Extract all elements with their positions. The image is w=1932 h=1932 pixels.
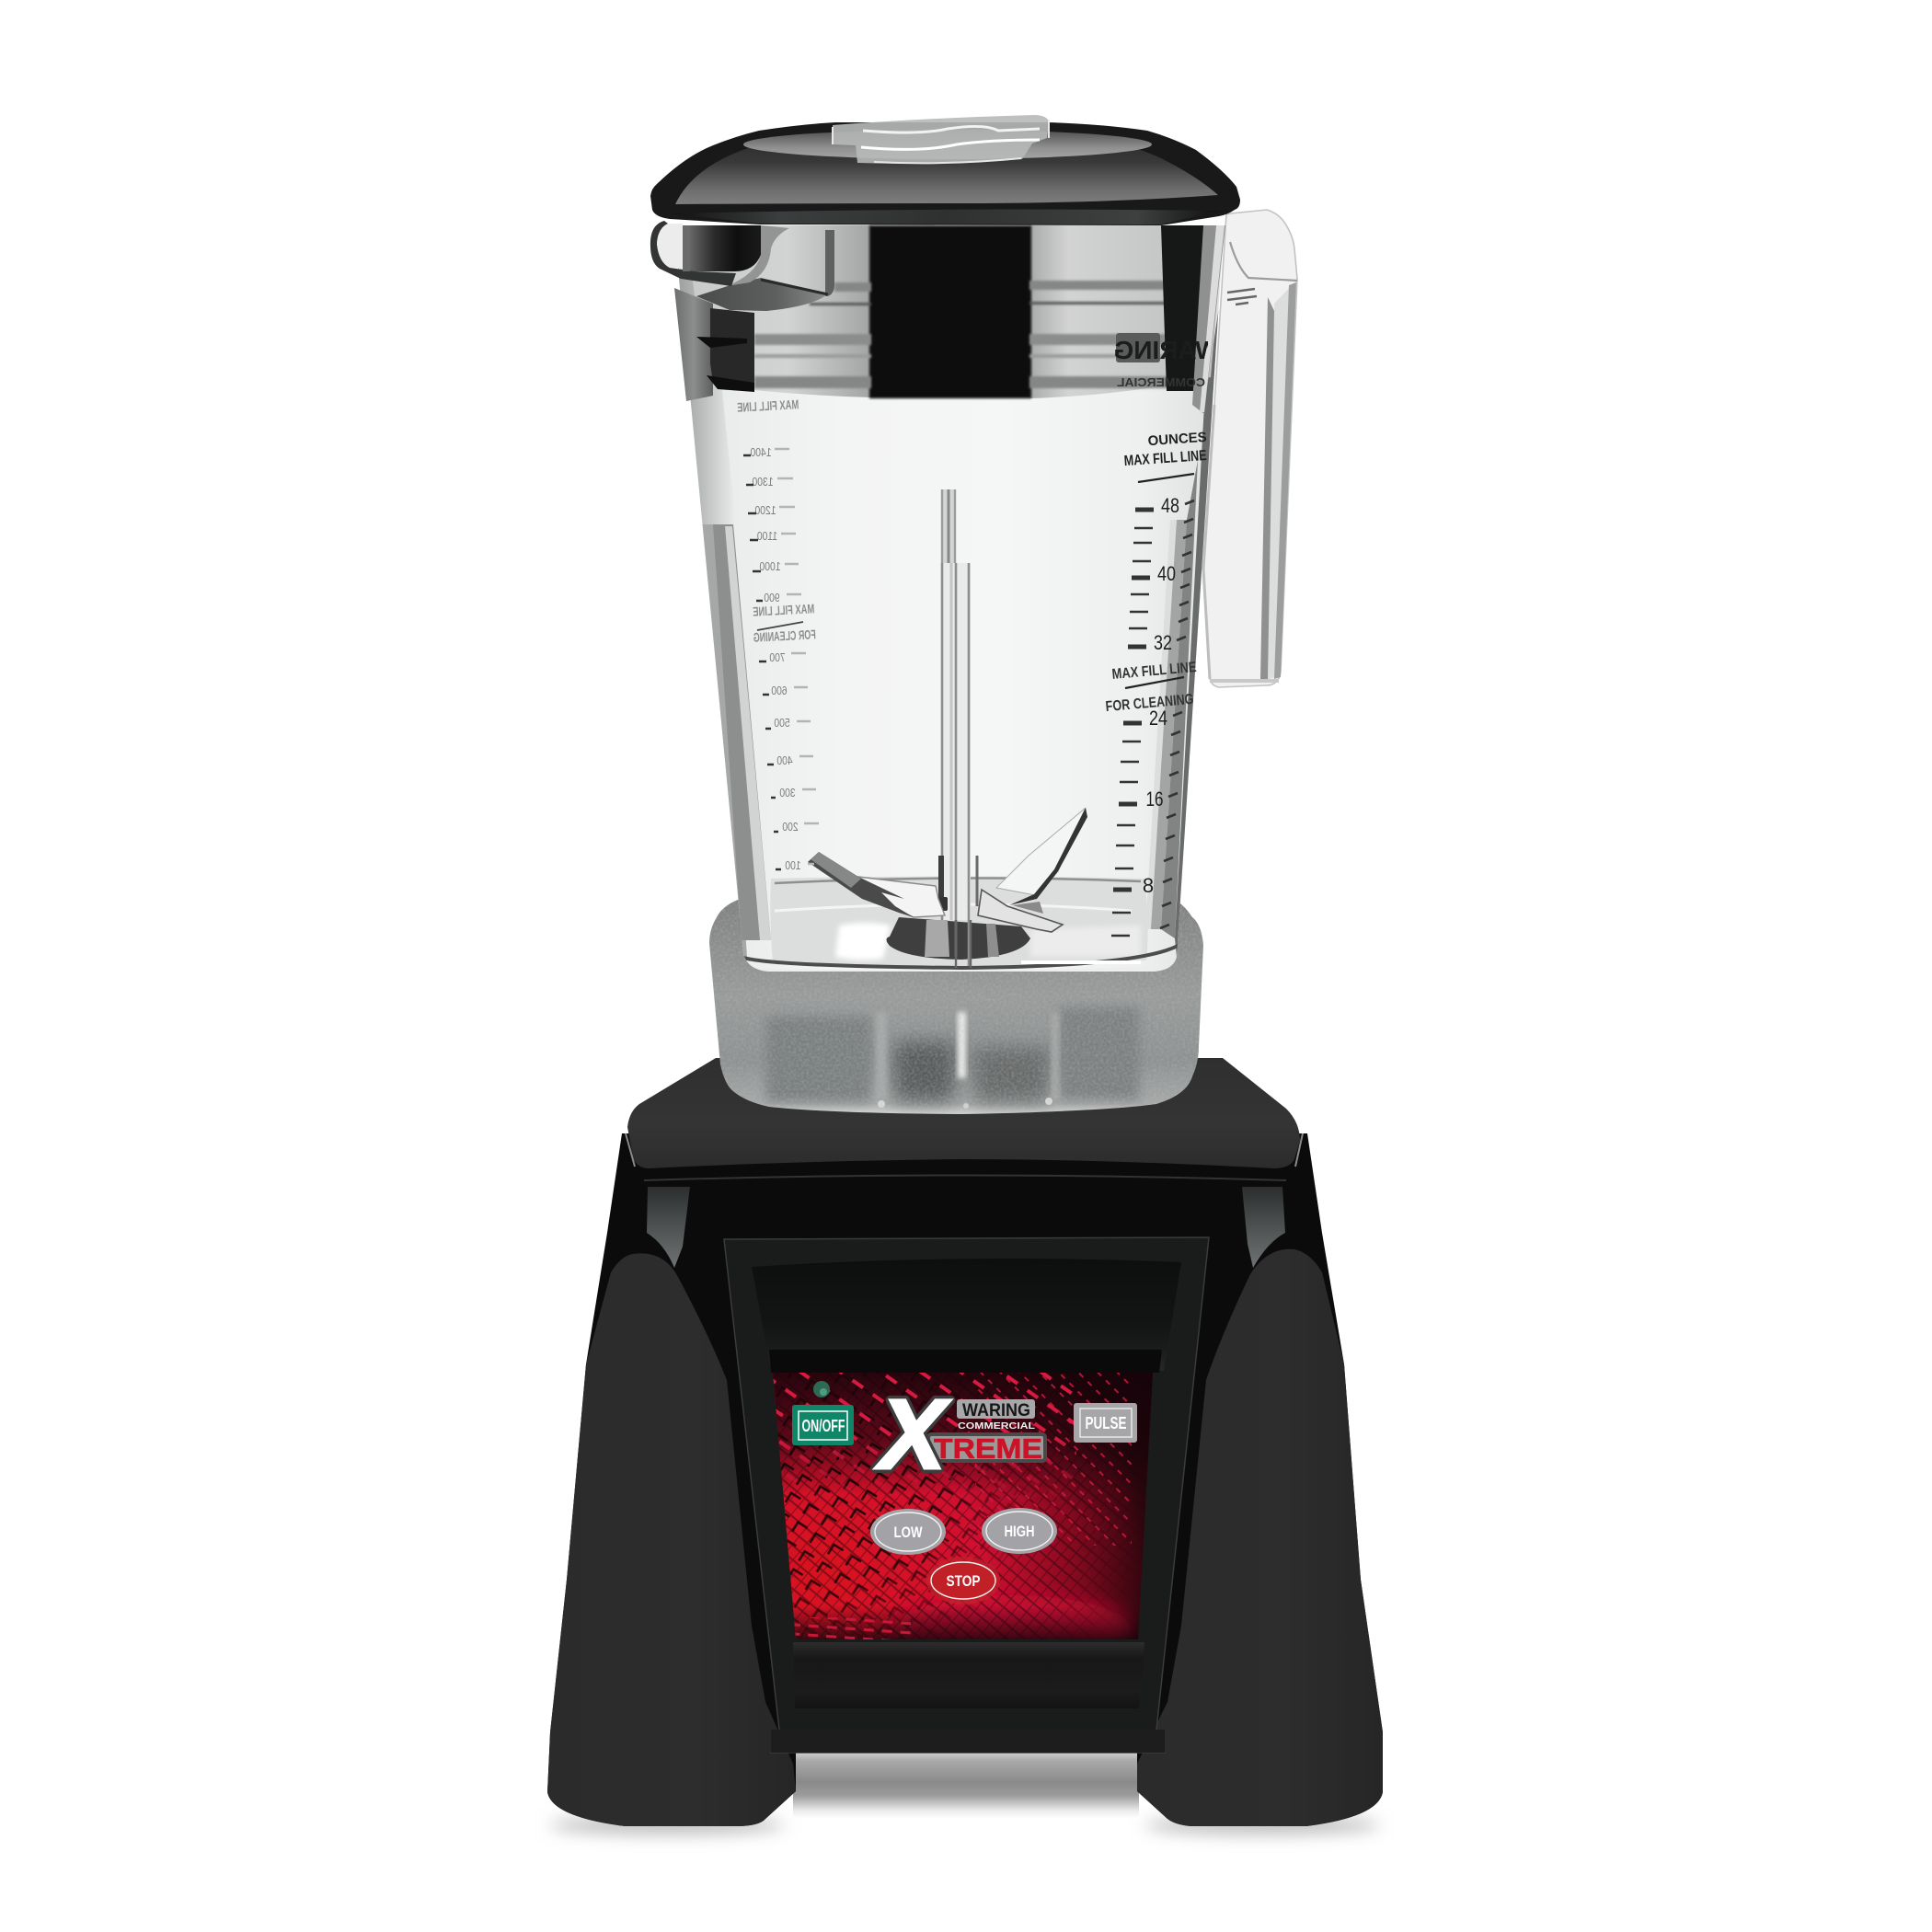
jar handle [1203, 210, 1297, 687]
logo: Waring Commercial Xtreme [875, 1378, 1047, 1489]
ounce numbers: 16 [1146, 788, 1163, 811]
lid [650, 115, 1240, 225]
inner collar [650, 221, 1225, 414]
left wall reflection [713, 524, 771, 940]
lid band [670, 210, 1220, 224]
left blade [808, 852, 945, 917]
ounce headings: MAX FILL LINE [1123, 448, 1207, 469]
frosted jar collar [709, 900, 1203, 1114]
logo: Waring Commercial Xtreme: COMMERCIAL [958, 1421, 1035, 1432]
low button [870, 1509, 946, 1555]
on/off button [792, 1405, 854, 1445]
stop button [926, 1557, 1000, 1604]
bezel bottom bar [771, 1730, 1165, 1753]
collar ring bands [754, 281, 1182, 388]
blender base [547, 1058, 1383, 1826]
inner spout dark [690, 225, 761, 271]
ounce right ticks [1160, 500, 1194, 928]
high button: HIGH [1005, 1523, 1034, 1540]
pulse button: PULSE [1086, 1414, 1126, 1432]
mirrored brand on collar: WARING [1113, 336, 1220, 364]
center dark band [869, 225, 1031, 398]
logo: Waring Commercial Xtreme: X [875, 1378, 951, 1489]
millilitre scale, mirrored through jar [737, 397, 819, 872]
mirrored left ticks [743, 455, 781, 869]
on/off button: ON/OFF [802, 1417, 845, 1435]
blender product illustration [547, 115, 1383, 1844]
left outer wall shade [679, 278, 730, 524]
recess ridge [769, 1350, 1162, 1373]
millilitre scale, mirrored through jar: 500 [774, 717, 790, 730]
gloss highlight left [647, 1187, 690, 1268]
gloss highlight right [1242, 1187, 1285, 1268]
top plate [627, 1058, 1300, 1168]
blade hub [887, 917, 1030, 960]
logo: Waring Commercial Xtreme: X [875, 1378, 951, 1489]
mirrored brand on collar: COMMERCIAL [1117, 375, 1205, 389]
mirrored max fill labels: MAX FILL LINE [753, 601, 815, 619]
ounce headings [1105, 430, 1207, 715]
lid top surface [675, 133, 1218, 204]
mirrored max fill labels: FOR CLEANING [753, 627, 816, 645]
ounce headings: OUNCES [1147, 430, 1207, 449]
millilitre scale, mirrored through jar: 900 [764, 592, 780, 604]
recess window [752, 1259, 1181, 1371]
ounce numbers: 48 [1161, 494, 1179, 517]
ounce headings: MAX FILL LINE [1111, 660, 1197, 683]
left soft side panel [547, 1253, 796, 1826]
millilitre scale, mirrored through jar: 1300 [752, 476, 774, 489]
jar body [650, 221, 1225, 972]
lower recess [793, 1642, 1144, 1708]
right dark column [1161, 225, 1209, 391]
pulse button [1074, 1403, 1137, 1443]
millilitre scale, mirrored through jar: 1100 [756, 530, 777, 543]
jar floor [770, 876, 1148, 967]
millilitre scale, mirrored through jar: 600 [771, 684, 788, 697]
logo: Waring Commercial Xtreme: WARING [962, 1401, 1030, 1420]
ounce major ticks [1113, 510, 1154, 890]
ounce numbers: 8 [1143, 874, 1154, 897]
plate side glints [626, 1133, 1303, 1167]
millilitre scale, mirrored through jar: 1400 [750, 446, 772, 459]
collar flanges [696, 337, 754, 392]
right wall reflection [1148, 520, 1187, 929]
ounce minor ticks [1111, 528, 1153, 936]
ounce numbers: 24 [1149, 707, 1167, 730]
millilitre scale, mirrored through jar: 100 [785, 859, 801, 872]
ounce numbers [1143, 494, 1179, 897]
millilitre scale, mirrored through jar: 400 [776, 754, 793, 767]
ounce numbers: 40 [1157, 562, 1176, 585]
collar light right [1029, 225, 1224, 398]
high button [982, 1508, 1057, 1554]
millilitre scale, mirrored through jar: 300 [779, 787, 796, 799]
outer left wall in collar [674, 288, 713, 401]
left pour wedge [696, 278, 828, 311]
ounce numbers: 32 [1154, 631, 1172, 654]
mirrored max fill labels [737, 397, 816, 645]
millilitre scale, mirrored through jar: 1200 [754, 504, 776, 517]
millilitre scale, mirrored through jar: 700 [769, 651, 786, 664]
stop button: STOP [946, 1572, 981, 1590]
millilitre scale, mirrored through jar: 1000 [759, 560, 781, 573]
center shaft [929, 489, 977, 968]
spout tab [650, 221, 736, 286]
floor shadow [549, 1753, 1380, 1834]
ounce headings: FOR CLEANING [1105, 692, 1194, 715]
power LED [813, 1381, 830, 1397]
right blade [978, 808, 1087, 932]
control panel [773, 1373, 1153, 1639]
center bezel [724, 1237, 1209, 1753]
outer right wall strip [1192, 225, 1225, 414]
mirrored right ticks [775, 449, 819, 864]
mirrored max fill labels: MAX FILL LINE [737, 397, 799, 415]
spout wall curve [727, 225, 789, 286]
collar grey vertical bar [825, 230, 834, 296]
millilitre scale, mirrored through jar: 200 [782, 821, 799, 834]
low button: LOW [894, 1524, 923, 1541]
clear lid plug [833, 115, 1049, 164]
plate reflection strip [644, 1176, 1286, 1180]
ounce scale [1105, 430, 1207, 936]
base body glossy housing [547, 1133, 1383, 1826]
logo: Waring Commercial Xtreme: TREME [934, 1432, 1042, 1465]
lid opening [743, 130, 1152, 159]
mirrored brand on collar [1115, 333, 1208, 386]
right soft side panel [1137, 1249, 1383, 1826]
collar light left [685, 225, 871, 397]
lid outline [650, 122, 1240, 225]
left dark column [710, 308, 754, 392]
